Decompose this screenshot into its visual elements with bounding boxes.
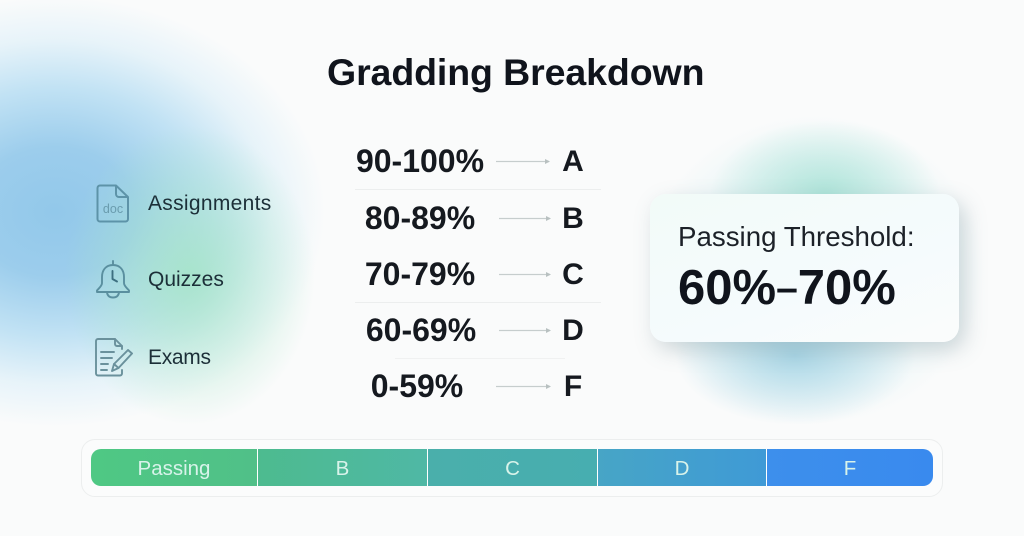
row: 90-100% to A: 90-100% [356, 143, 484, 179]
item: Assignments [96, 184, 272, 222]
progress bar [81, 439, 943, 497]
row: 80-89% to B: B [562, 202, 584, 235]
segment: Passing: Passing [138, 457, 210, 480]
item: Assignments: Assignments [148, 192, 272, 215]
callout value: 60%–70% [678, 261, 896, 315]
row: 0-59% to F: 0-59% [371, 368, 463, 404]
segment: F: F [844, 457, 856, 480]
background glow: right [640, 105, 1000, 435]
callout: passing threshold [650, 194, 959, 342]
row: 60-69% to D: 60-69% [366, 312, 476, 348]
segment: C [428, 449, 597, 486]
segment: Passing [91, 449, 257, 486]
segment: B [258, 449, 427, 486]
row: 70-79% to C [365, 256, 584, 292]
row: 70-79% to C: 70-79% [365, 256, 475, 292]
segment: F [767, 449, 933, 486]
row: 80-89% to B: 80-89% [365, 200, 475, 236]
segment: B: B [336, 457, 349, 480]
row: 0-59% to F: F [564, 370, 582, 403]
callout label: Passing Threshold: [678, 221, 915, 252]
row: 70-79% to C: C [562, 258, 584, 291]
item: Exams [95, 338, 211, 376]
row: 60-69% to D [366, 312, 584, 348]
item: Quizzes: Quizzes [148, 268, 224, 291]
item: Assignments: doc [103, 202, 123, 216]
background glow: left [0, 0, 340, 440]
row: 90-100% to A [356, 143, 584, 179]
segment: C: C [505, 457, 520, 480]
segment: D: D [675, 457, 689, 480]
item: Exams: Exams [148, 346, 211, 369]
row: 0-59% to F [371, 368, 582, 404]
grade table [355, 143, 601, 404]
row: 60-69% to D: D [562, 314, 584, 347]
row: 80-89% to B [365, 200, 584, 236]
title: Gradding Breakdown [327, 51, 704, 93]
row: 90-100% to A: A [562, 145, 584, 178]
segment: D [598, 449, 766, 486]
item: Quizzes [96, 260, 224, 298]
category list [95, 184, 272, 376]
